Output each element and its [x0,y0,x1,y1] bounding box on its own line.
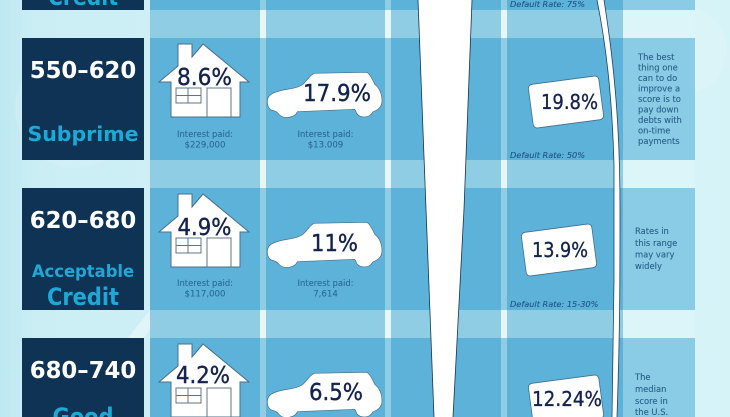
note: median score: median [635,384,666,394]
house mortgage rate: Interest paid: [177,130,233,140]
note: median score: score in [635,396,668,406]
score box: acceptable credit: 620–680 [30,208,136,234]
house mortgage rate: 4.2% [176,363,230,389]
car loan rate [267,372,382,417]
credit card rate [521,224,597,276]
default rate 15-30%: Default Rate: 15-30% [510,299,599,309]
score box: subprime: Subprime [27,122,139,146]
note: paying down debts: on-time [638,126,670,136]
score box: acceptable credit [22,188,144,311]
credit card rate: 12.24% [532,387,602,411]
house mortgage rate [159,194,249,300]
data grid: table columns and row bands [150,0,695,417]
car loan rate: Interest paid: [298,130,354,140]
score box: good: 680–740 [30,358,136,384]
note: paying down debts: improve a [638,84,680,94]
score box: acceptable credit: Acceptable [32,262,134,281]
car loan rate: 7,614 [313,290,338,300]
house mortgage rate: Interest paid: [177,279,233,289]
credit card rate: 13.9% [532,238,588,262]
score box: subprime [22,38,144,160]
car loan rate: 17.9% [303,81,371,107]
car loan rate: Interest paid: [298,279,354,289]
row: top partial row [22,0,585,11]
car loan rate [267,72,382,150]
note: median score: The [634,372,651,382]
row: 620-680 acceptable credit [22,188,680,311]
house mortgage rate: $117,000 [184,290,226,300]
note: paying down debts: pay down [638,104,679,114]
car loan rate [267,222,382,300]
house mortgage rate: 4.9% [178,215,232,241]
note: paying down debts: payments [638,136,680,146]
house mortgage rate [159,344,249,417]
house mortgage rate [159,44,249,150]
credit card rate: 19.8% [541,90,598,114]
curved white strip [597,0,620,417]
car loan rate: $13.009 [308,140,343,150]
funnel: tapering white spike [418,0,472,417]
car loan rate: 6.5% [309,380,363,406]
note: paying down debts: thing one [638,62,678,72]
note: rates vary widely: Rates in [635,226,669,236]
score box: subprime: 550–620 [30,58,136,84]
row: 550-620 subprime [22,38,685,160]
note: paying down debts: can to do [638,73,677,83]
credit card rate [528,375,604,417]
note: rates vary widely: this range [635,238,677,248]
row: 680-740 good credit [22,338,670,417]
score box: bad credit [22,0,144,11]
note: paying down debts: The best [637,52,675,62]
default rate 50%: Default Rate: 50% [510,150,585,160]
note: rates vary widely: widely [635,261,662,271]
score box: acceptable credit: Credit [47,283,119,311]
note: median score: the U.S. [635,407,668,417]
credit card rate [528,76,604,128]
note: paying down debts: debts with [638,115,682,125]
score box: good [22,338,144,417]
house mortgage rate: $229,000 [184,140,226,150]
car loan rate: 11% [311,231,358,257]
note: rates vary widely: may vary [635,250,674,260]
note: paying down debts: score is to [638,94,681,104]
house mortgage rate: 8.6% [177,65,232,91]
